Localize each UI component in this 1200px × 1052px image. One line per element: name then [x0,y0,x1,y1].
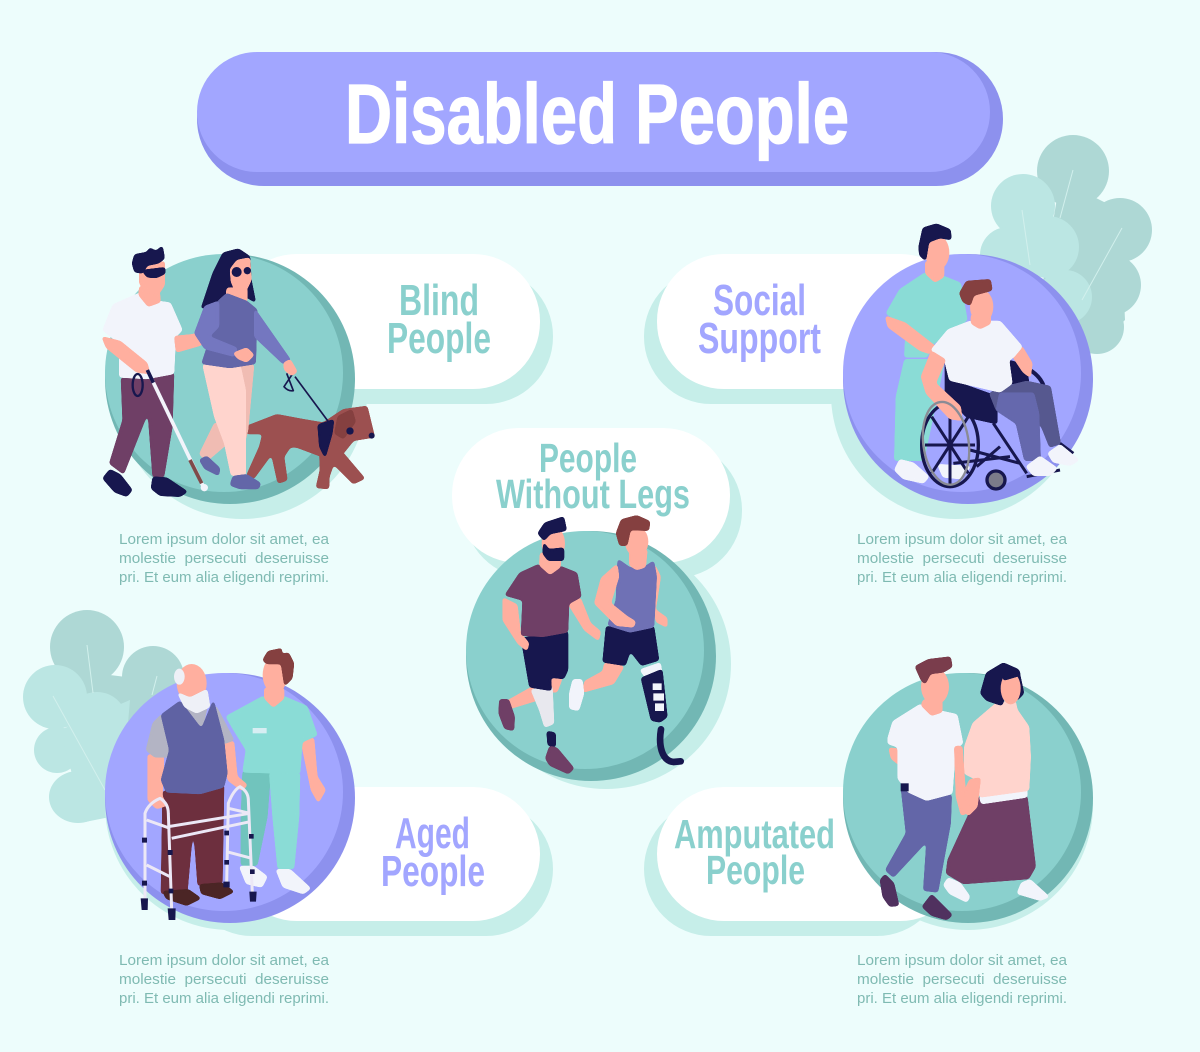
heading: social support: Social [713,276,806,325]
illustration: two runners with prosthetic legs [499,516,681,773]
heading: blind people: People [387,314,491,363]
panel: aged people [105,649,553,936]
text block: aged people: molestie persecuti deseruisse [119,972,329,988]
text block: social support: Lorem ipsum dolor sit amet, ea [857,532,1068,548]
heading: aged people: People [381,847,485,896]
text block: blind people [119,532,330,586]
text block: blind people: pri. Et eum alia eligendi reprimi. [119,570,329,586]
illustration: blind couple and guide dog [103,247,375,496]
leaves: bottom left [23,610,184,823]
heading: amputated people [674,811,835,893]
heading: aged people [381,809,485,896]
text block: aged people: pri. Et eum alia eligendi reprimi. [119,991,329,1007]
text block: social support: pri. Et eum alia eligendi reprimi. [857,570,1067,586]
leaves: top right [980,135,1152,354]
title: Disabled People [345,67,849,161]
illustration: nurse and wheelchair user [886,224,1078,489]
title banner [197,52,1003,186]
panel: people without legs [452,428,742,789]
panel: social support [644,224,1093,519]
panel: blind people [103,247,553,519]
heading: social support [698,276,821,363]
illustration: amputee man and woman holding hands [881,657,1048,919]
text block: aged people [119,953,330,1007]
heading: people without legs: People [539,435,637,481]
text block: blind people: molestie persecuti deseruisse [119,551,329,567]
text block: amputated people: molestie persecuti deseruisse [857,972,1067,988]
panel: amputated people [644,657,1093,936]
text block: amputated people: pri. Et eum alia eligendi reprimi. [857,991,1067,1007]
heading: amputated people: People [706,847,805,893]
heading: blind people: Blind [399,276,479,325]
heading: aged people: Aged [395,809,470,858]
text block: blind people: Lorem ipsum dolor sit amet, ea [119,532,330,548]
text block: aged people: Lorem ipsum dolor sit amet, ea [119,953,330,969]
heading: people without legs [496,435,690,517]
text block: amputated people [857,953,1068,1007]
text block: amputated people: Lorem ipsum dolor sit amet, ea [857,953,1068,969]
heading: blind people [387,276,491,363]
text block: social support: molestie persecuti deseruisse [857,551,1067,567]
heading: amputated people: Amputated [674,811,835,857]
illustration: elderly man with walker and nurse [141,649,325,920]
heading: social support: Support [698,314,821,363]
text block: social support [857,532,1068,586]
heading: people without legs: Without Legs [496,471,690,517]
